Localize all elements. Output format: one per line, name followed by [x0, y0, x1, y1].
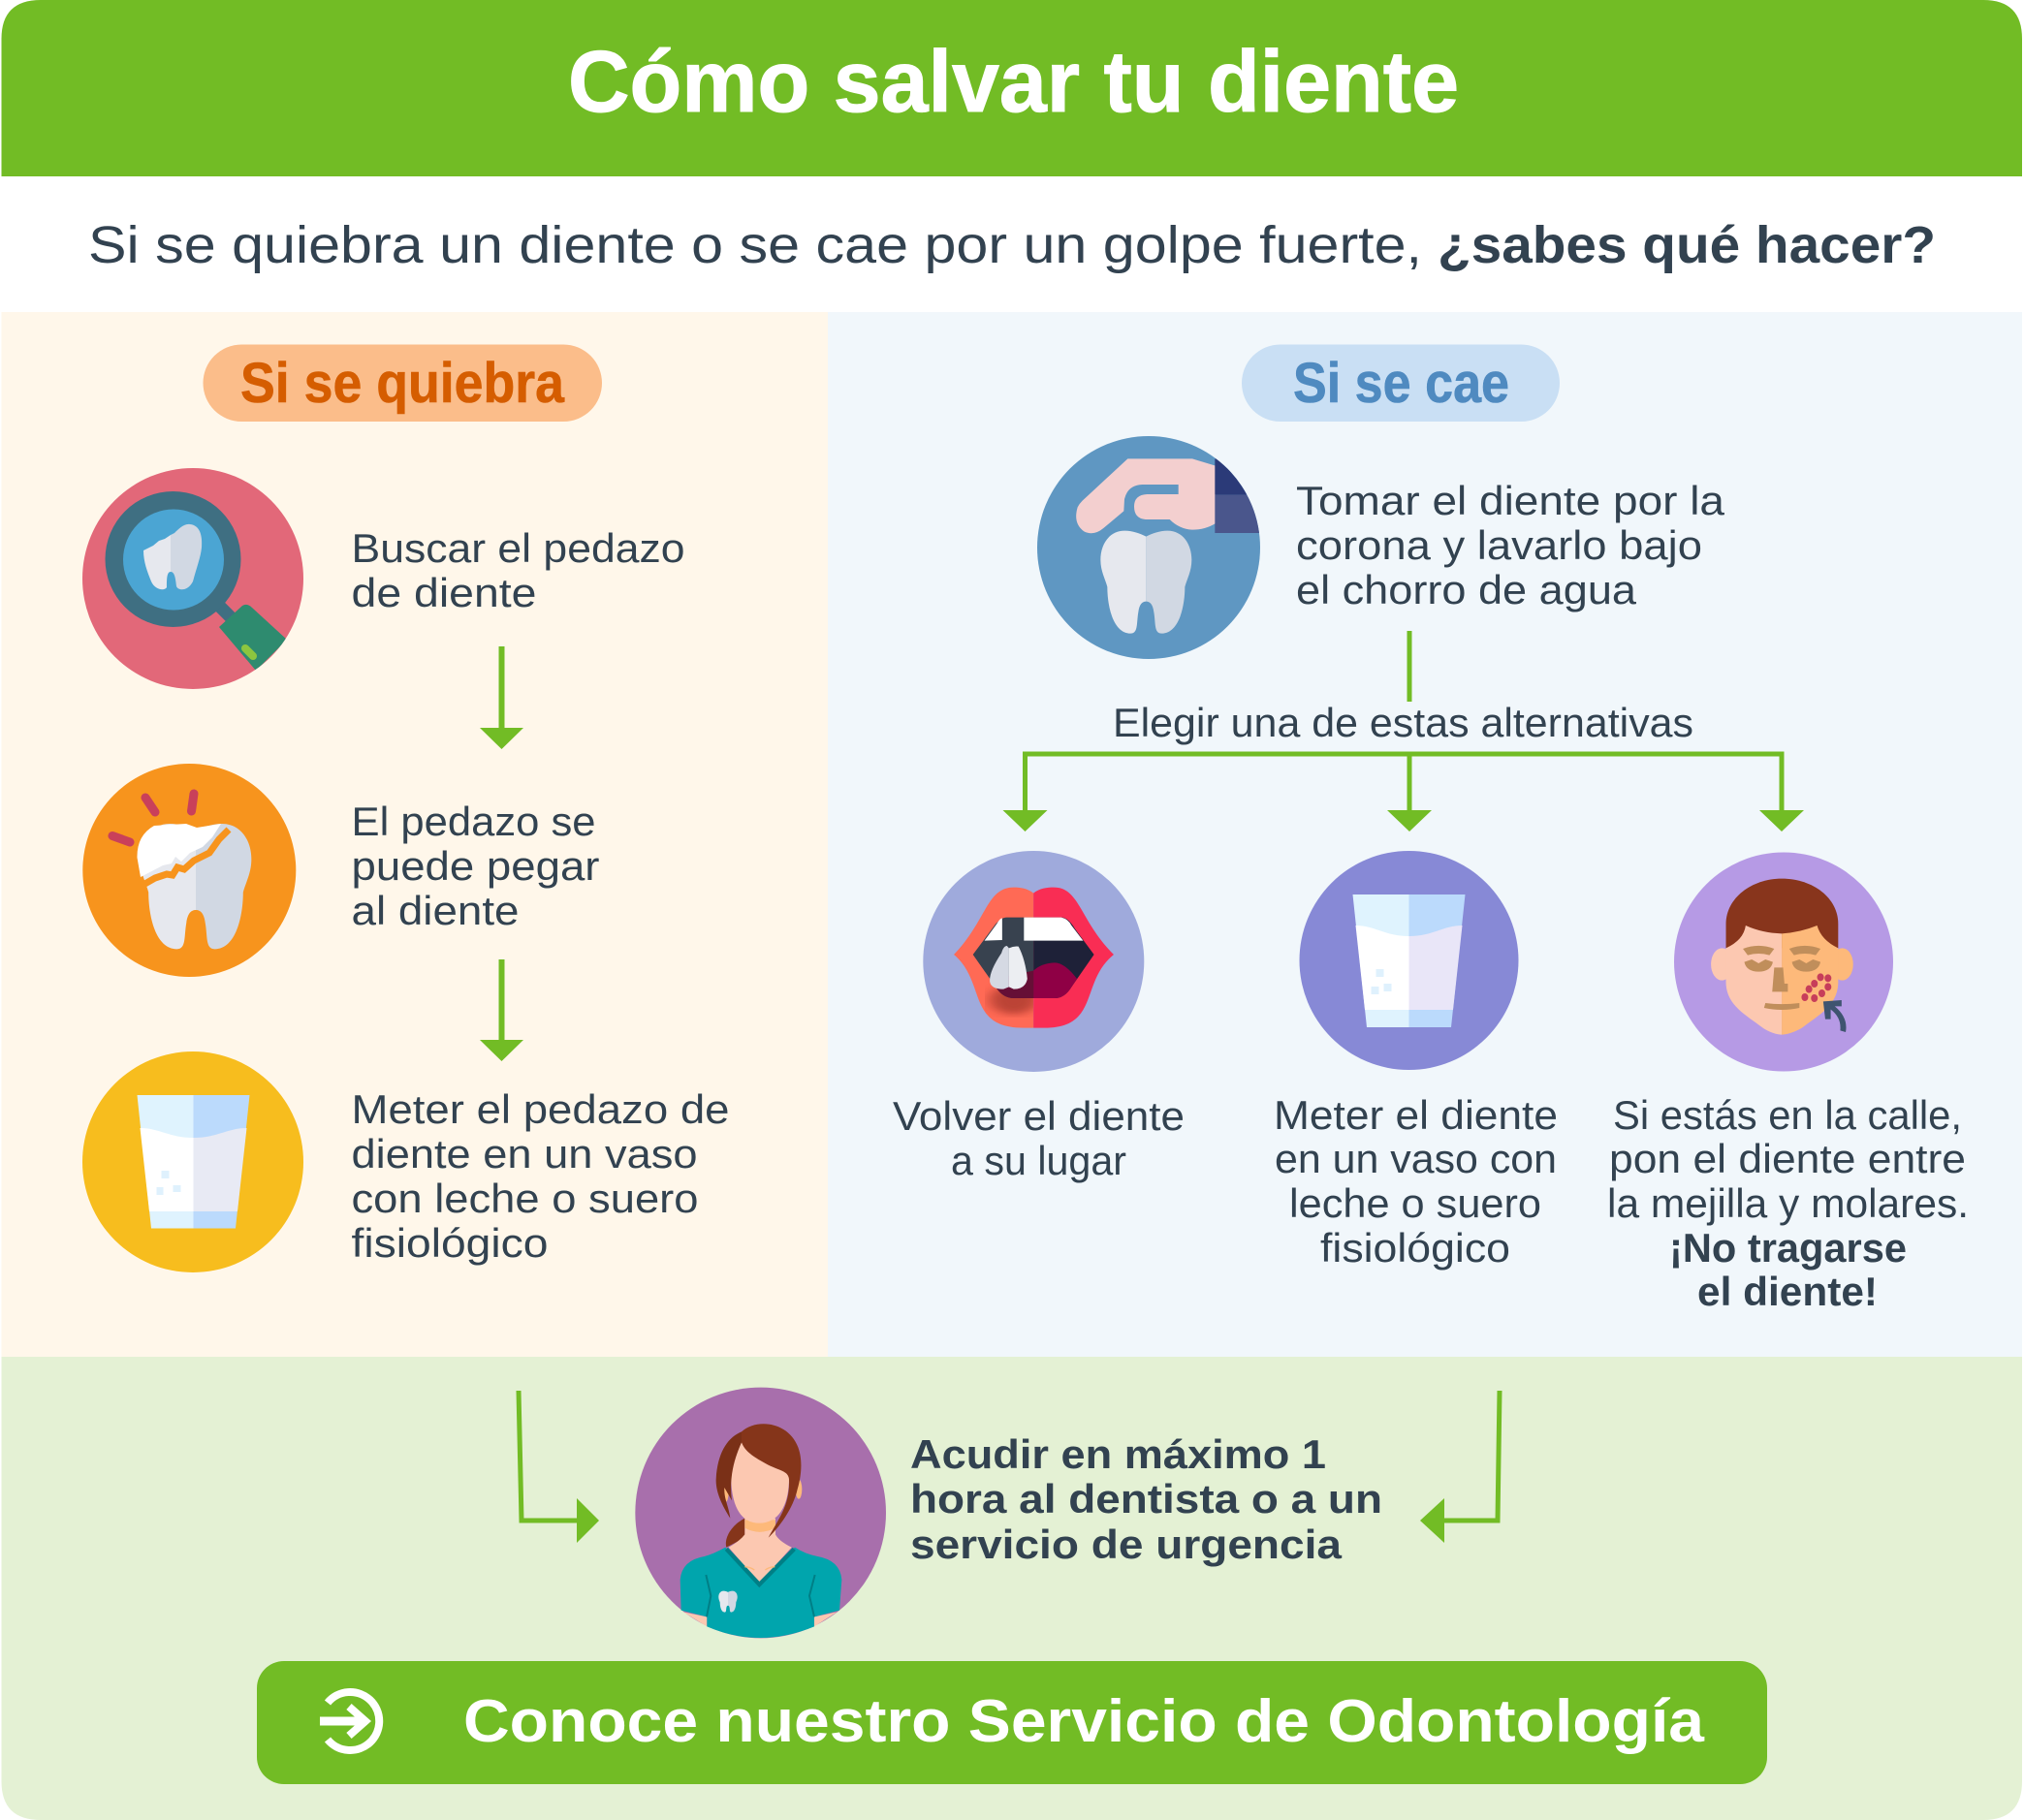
arrow: left to dentist — [519, 1391, 599, 1543]
step text: vaso: con leche o suero — [351, 1176, 698, 1221]
text: elegir alternativa: Elegir una de estas alternativas — [1113, 700, 1693, 745]
arrow: right to dentist — [1420, 1391, 1500, 1543]
option text: mejilla: el diente! — [1697, 1269, 1878, 1314]
step text: vaso: fisiológico — [351, 1220, 549, 1266]
step text: tomar el diente: Tomar el diente por la — [1296, 478, 1725, 523]
step text: pegar: El pedazo se — [351, 799, 595, 844]
option text: vaso: en un vaso con — [1275, 1136, 1557, 1181]
option text: vaso — [1274, 1092, 1558, 1271]
subtitle: Si se quiebra un diente o se cae por un golpe fuerte, — [88, 216, 1422, 274]
icon: magnifier over tooth — [82, 468, 303, 689]
step text: tomar el diente: el chorro de agua — [1296, 567, 1637, 612]
text: acudir: servicio de urgencia — [910, 1522, 1343, 1567]
text: acudir: Acudir en máximo 1 — [910, 1431, 1326, 1477]
text: acudir — [910, 1431, 1382, 1567]
title: Cómo salvar tu diente — [568, 34, 1459, 131]
icon: dentist woman — [635, 1388, 886, 1638]
option text: vaso: Meter el diente — [1274, 1092, 1558, 1138]
heading pill: si se quiebra: Si se quiebra — [240, 352, 565, 415]
step text: vaso: diente en un vaso — [351, 1131, 698, 1177]
step text: tomar el diente — [1296, 478, 1725, 612]
option text: volver: Volver el diente — [893, 1093, 1185, 1139]
arrow down — [480, 959, 523, 1061]
option text: vaso: leche o suero — [1289, 1180, 1541, 1226]
subtitle — [88, 216, 1936, 274]
step text: buscar — [351, 525, 684, 615]
icon: broken tooth — [82, 764, 296, 977]
call to action button: Conoce nuestro Servicio de Odontología — [463, 1688, 1705, 1755]
arrow down — [480, 646, 523, 749]
step text: vaso — [351, 1086, 729, 1266]
option text: volver: a su lugar — [951, 1138, 1126, 1183]
step text: pegar: puede pegar — [351, 843, 600, 889]
option text: mejilla — [1607, 1092, 1969, 1314]
icon: glass of milk — [1299, 851, 1518, 1070]
header band — [2, 0, 2022, 176]
option text: mejilla: Si estás en la calle, — [1613, 1092, 1962, 1138]
icon: open mouth with tooth — [923, 851, 1144, 1072]
heading pill: si se cae: Si se cae — [1293, 352, 1509, 415]
text: acudir: hora al dentista o a un — [910, 1476, 1382, 1522]
icon: glass of milk — [82, 1051, 303, 1272]
panel: si se cae — [828, 312, 2022, 1357]
option text: mejilla: pon el diente entre — [1609, 1136, 1966, 1181]
option text: mejilla: ¡No tragarse — [1669, 1225, 1907, 1271]
icon: enter arrow — [320, 1692, 379, 1750]
step text: buscar: de diente — [351, 570, 537, 615]
option text: mejilla: la mejilla y molares. — [1607, 1180, 1969, 1226]
step text: pegar — [351, 799, 600, 933]
subtitle: ¿sabes qué hacer? — [1438, 216, 1936, 274]
panel: si se quiebra — [2, 312, 828, 1357]
step text: vaso: Meter el pedazo de — [351, 1086, 729, 1132]
panel: dentist — [2, 1357, 2022, 1820]
option text: vaso: fisiológico — [1320, 1225, 1510, 1271]
step text: pegar: al diente — [351, 888, 520, 933]
branching arrows — [1002, 754, 1804, 832]
heading pill: si se cae — [1242, 345, 1560, 422]
step text: buscar: Buscar el pedazo — [351, 525, 684, 571]
icon: hand holding tooth — [1037, 436, 1263, 659]
connector stem — [1407, 631, 1411, 702]
option text: volver — [893, 1093, 1185, 1183]
call to action button — [257, 1661, 1767, 1784]
step text: tomar el diente: corona y lavarlo bajo — [1296, 522, 1702, 568]
icon: face with tooth in cheek — [1674, 853, 1893, 1072]
